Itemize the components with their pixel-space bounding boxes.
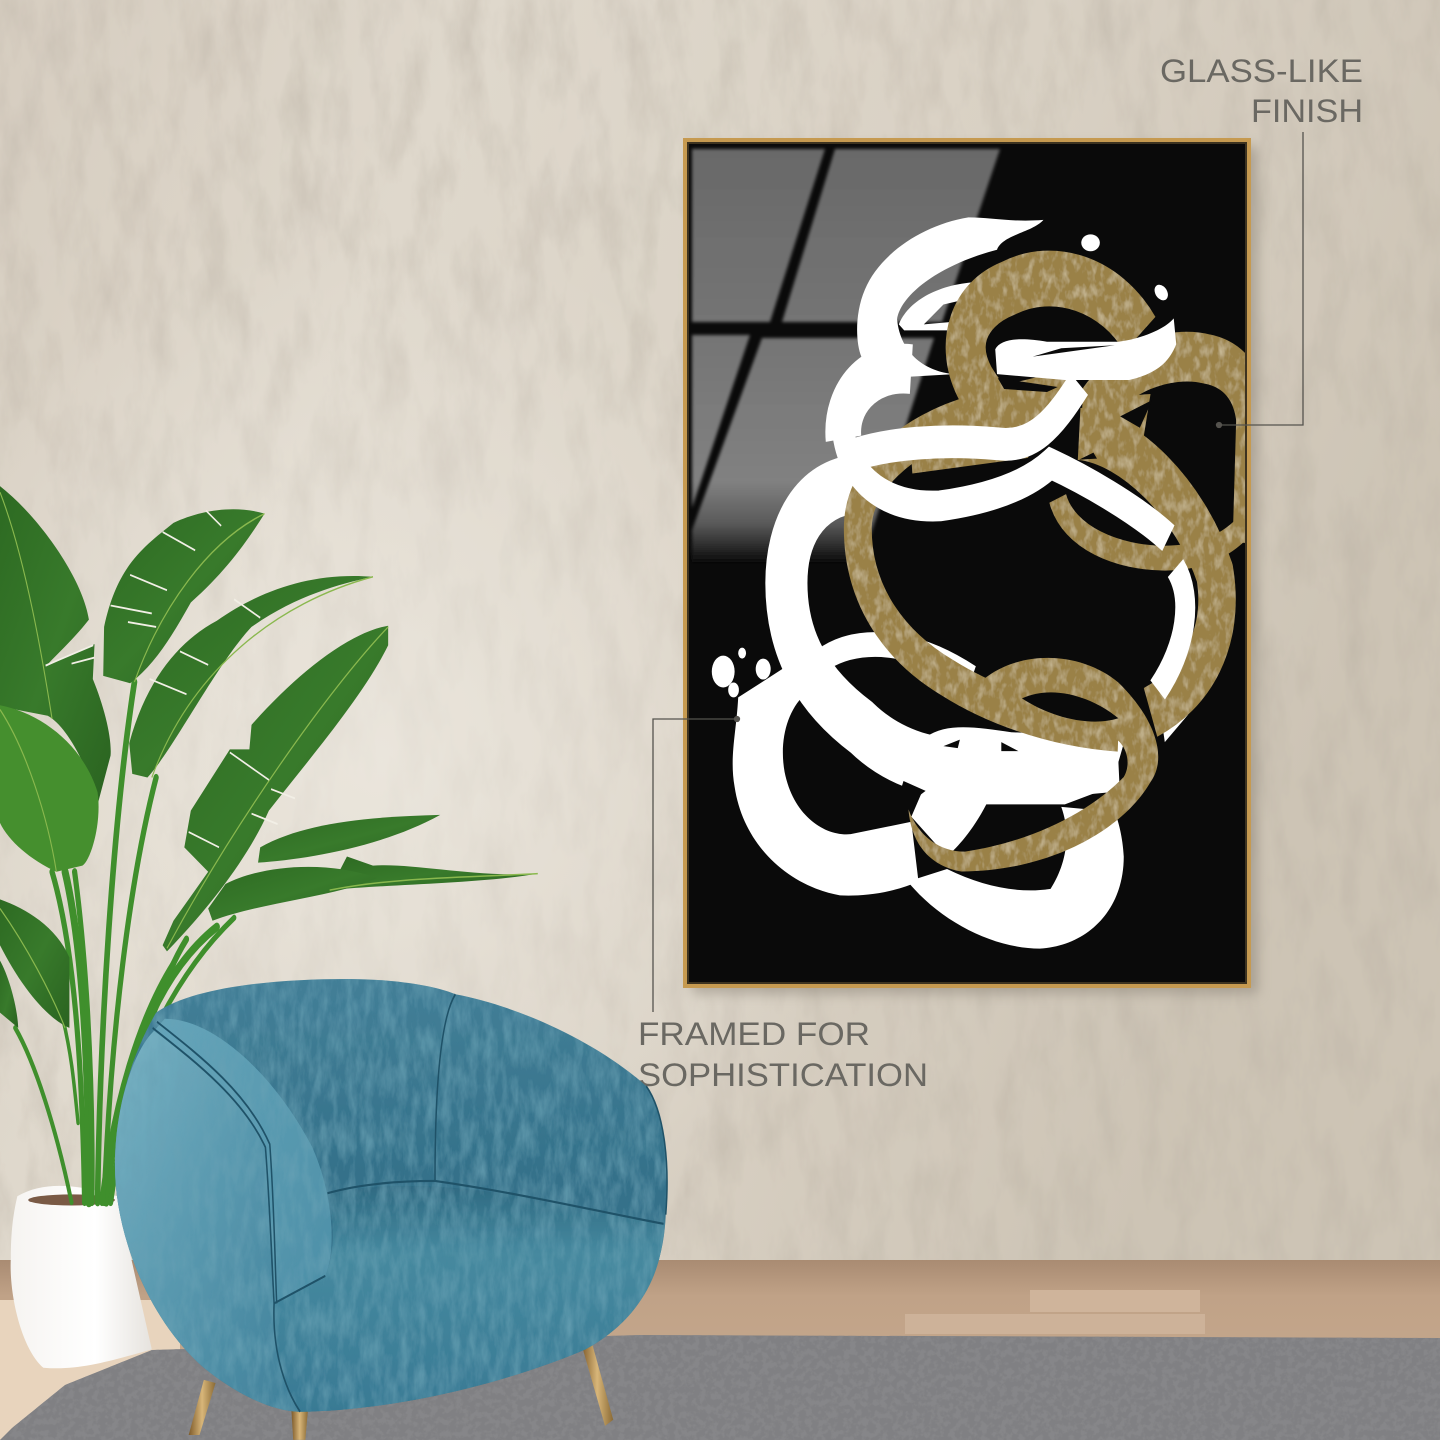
white plant pot bbox=[11, 1186, 152, 1368]
callout leader: framed for sophistication bbox=[653, 716, 740, 1012]
white large ring left bbox=[786, 369, 1118, 772]
callout text: glass-like finish: GLASS-LIKE bbox=[1160, 53, 1363, 89]
white brush shapes bbox=[712, 217, 1188, 949]
glass window reflection bbox=[692, 149, 1000, 562]
banana leaves bbox=[0, 486, 538, 1028]
chair outer arm bbox=[115, 1031, 299, 1412]
callout text: framed for sophistication: FRAMED FOR bbox=[638, 1016, 870, 1052]
white ring over gold bbox=[844, 384, 1185, 690]
grey rug bbox=[0, 1335, 1440, 1440]
wood floor bbox=[0, 1260, 1440, 1440]
chair seat bbox=[273, 1186, 664, 1412]
callout text: glass-like finish: FINISH bbox=[1251, 93, 1363, 129]
plant stems bbox=[15, 682, 234, 1202]
chair inner arm bbox=[154, 1019, 332, 1303]
small black triangles bbox=[902, 740, 1018, 795]
leaf midribs and tears bbox=[0, 492, 538, 1028]
chair legs bbox=[189, 1343, 613, 1440]
black canvas bbox=[688, 143, 1246, 983]
chair back bbox=[115, 979, 667, 1412]
chair piping and seams bbox=[153, 994, 667, 1412]
black gaps in gold bbox=[1079, 400, 1152, 460]
callout text: framed for sophistication: SOPHISTICATION bbox=[638, 1057, 928, 1093]
gold lower loop bbox=[908, 658, 1158, 871]
abstract rings bbox=[712, 217, 1254, 949]
callout leader: glass-like finish bbox=[1216, 132, 1303, 428]
plant bbox=[0, 486, 538, 1202]
framed artwork bbox=[683, 138, 1254, 988]
white brush top center bbox=[995, 318, 1176, 380]
frame shadow bbox=[692, 146, 1258, 994]
black slivers bbox=[998, 345, 1115, 392]
gold rings bbox=[858, 278, 1254, 732]
blue velvet armchair bbox=[115, 979, 667, 1440]
gold frame bbox=[683, 138, 1251, 988]
